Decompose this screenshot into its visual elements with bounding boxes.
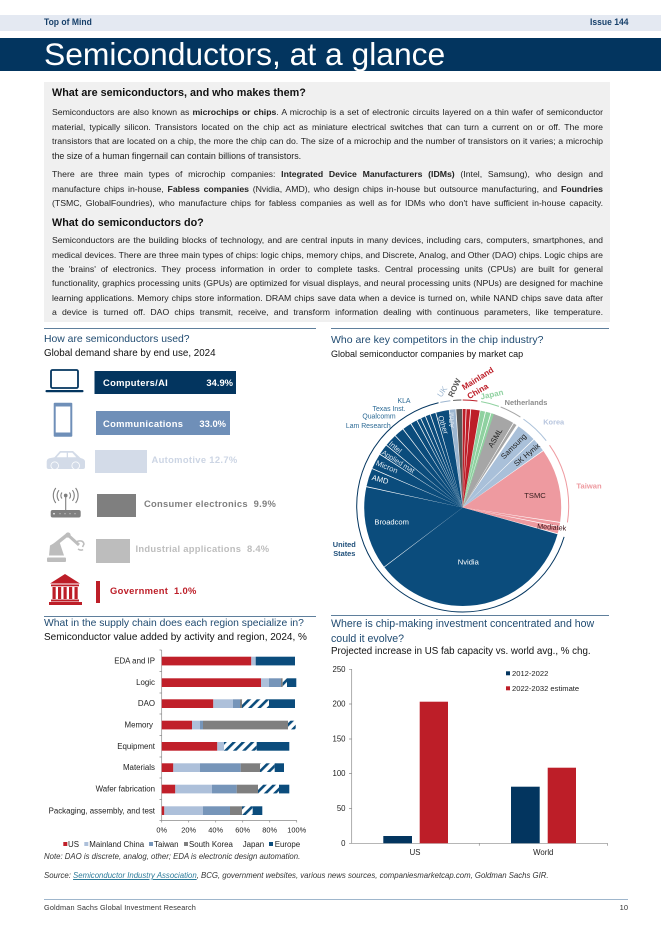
bars: Wafer fabrication <box>162 785 289 793</box>
bar: consumer electronics: Consumer electronics 9.9% <box>144 498 276 509</box>
slice labels: TSMC <box>524 491 546 500</box>
text block: functions: a device is turned off. DAO chips transmit, receive, and transform information dealing with continuous parameters, like temperature. <box>52 307 603 317</box>
bar: automotive <box>95 450 238 473</box>
icon: phone <box>54 403 72 437</box>
icon: laptop <box>46 370 84 392</box>
slice labels: SK Hynix <box>512 441 542 468</box>
y axis labels: 0 <box>341 839 346 848</box>
outer labels: Mainland <box>460 366 495 392</box>
panel: supply chain <box>44 616 316 861</box>
footer publisher: Goldman Sachs Global Investment Research <box>44 903 196 912</box>
icon: router <box>51 488 81 518</box>
text block: functions: the 'brains' of electronics. They process information in order to complete tasks. Central processing units (CPUs) are built for general <box>52 264 603 274</box>
y axis labels: 100 <box>332 769 346 778</box>
row labels: Equipment <box>117 742 156 751</box>
x axis labels: 60% <box>235 826 251 834</box>
panel: investment <box>331 615 609 857</box>
outer labels: KLA <box>397 398 411 405</box>
x axis labels: US <box>410 848 420 857</box>
title: Semiconductors, at a glance <box>44 36 445 72</box>
bar: consumer electronics <box>97 494 276 517</box>
panel heading: How are semiconductors used? <box>44 334 190 345</box>
panel: key competitors <box>331 328 609 612</box>
bars: Materials <box>162 763 284 772</box>
y axis labels: 200 <box>332 700 346 708</box>
row labels: DAO <box>138 699 155 708</box>
slice labels: Intel <box>387 439 404 456</box>
bars: US <box>383 702 448 843</box>
text block: company types: There are three main types of microchip companies: Integrated Device Manufacturers (IDMs) (Intel, Samsung), who design and <box>52 169 603 179</box>
outer labels: Texas Inst. <box>373 406 406 413</box>
section label: Top of Mind: Top of Mind <box>44 17 92 28</box>
bars: World <box>511 768 576 843</box>
outer labels: Korea <box>543 418 565 427</box>
panel heading: Where is chip-making investment concentrated and how <box>331 618 594 630</box>
outer labels: Japan <box>480 388 504 401</box>
panel heading: What in the supply chain does each region specialize in? <box>44 618 304 629</box>
text block: definition <box>52 107 603 161</box>
x axis labels <box>156 826 307 834</box>
slice labels: ASML <box>486 427 504 449</box>
bar: government <box>96 581 197 603</box>
panel: intro text <box>44 82 610 322</box>
bar: computers <box>94 371 236 394</box>
slice labels: Broadcom <box>374 518 409 527</box>
bars: Logic <box>162 678 296 687</box>
slice labels: Applied mat <box>380 450 415 475</box>
panel heading: could it evolve? <box>331 633 404 645</box>
legend: 2012-2022 <box>512 669 548 678</box>
row labels <box>49 656 156 816</box>
x axis labels <box>410 848 553 857</box>
outer labels <box>333 366 602 558</box>
text block: functions: functionality, graphics processing units (GPUs) are optimized for visual displays, and neural processing units (NPUs) are designed for machine <box>52 278 603 288</box>
panel: how are semiconductors used <box>44 328 316 605</box>
outer labels: UK <box>436 384 450 399</box>
x axis labels: 0% <box>156 826 167 834</box>
panel subheading: Projected increase in US fab capacity vs. world avg., % chg. <box>331 646 591 657</box>
row labels: Logic <box>136 678 155 687</box>
footer <box>44 899 628 914</box>
heading: what do semiconductors do: What do semiconductors do? <box>52 217 204 229</box>
bar: communications: 33.0% <box>199 418 227 429</box>
panel subheading: Global semiconductor companies by market cap <box>331 349 523 359</box>
bars: Packaging, assembly, and test <box>162 806 262 815</box>
axes <box>349 669 608 846</box>
title band <box>0 38 661 71</box>
text block: definition: transistors that are located on a chip, the more the chip can do. The size of a microchip and the number of transistors on it varies; a microchip <box>52 136 603 146</box>
text block: definition: material, typically silicon. Transistors located on the chip act as miniature electrical switches that can turn a current on or off. The more <box>52 122 603 132</box>
outer labels: Netherlands <box>505 398 547 407</box>
slice labels: Other <box>436 414 451 436</box>
bars: EDA and IP <box>162 657 295 665</box>
text block: company types: (TSMC, GlobalFoundries), who manufacture chips for fabless companies as well as for IDMs who don't have sufficient in-house capacity. <box>52 198 603 208</box>
icon: robot arm <box>47 532 84 562</box>
text block: functions: medical devices. There are three main types of chips: logic chips, memory chips, and Discrete, Analog, and Other (DAO) chips. Logic chips are <box>52 250 603 260</box>
text block: definition: the size of a human fingernail can contain billions of transistors. <box>52 151 301 161</box>
slice labels: Nvidia <box>458 557 480 566</box>
bar: government: Government 1.0% <box>110 585 197 596</box>
slice labels: ARM <box>449 412 456 428</box>
x axis labels: 100% <box>287 826 307 834</box>
row labels: Wafer fabrication <box>96 784 155 794</box>
pie chart: market cap <box>333 366 602 612</box>
page number: 10 <box>620 903 628 912</box>
bar: automotive: Automotive 12.7% <box>152 454 238 465</box>
outer labels: States <box>333 549 355 558</box>
legend: Japan <box>243 840 264 849</box>
legend: Taiwan <box>154 840 179 849</box>
panel subheading: Global demand share by end use, 2024 <box>44 348 216 359</box>
slice labels <box>371 412 567 566</box>
legend: Europe <box>275 840 301 849</box>
bar: communications: Communications <box>103 418 183 429</box>
text block: company types: manufacture chips in-house, Fabless companies (Nvidia, AMD), who design chips in-house but outsource manufacturing, and Foundries <box>52 184 603 194</box>
row labels: Materials <box>123 763 155 772</box>
slice labels: Mediatek <box>537 522 567 533</box>
bars: Equipment <box>162 742 289 751</box>
demand share chart <box>46 369 276 605</box>
icon: government building <box>49 574 82 605</box>
bar: communications <box>96 411 230 435</box>
outer labels: Lam Research <box>346 423 391 430</box>
slice labels: Micron <box>375 458 399 475</box>
bar: industrial applications: Industrial applications 8.4% <box>136 543 270 554</box>
header band <box>0 15 661 31</box>
legend: US <box>68 840 79 849</box>
icon: car <box>47 451 85 470</box>
x axis labels: 20% <box>181 826 197 834</box>
panel heading: Who are key competitors in the chip industry? <box>331 334 543 346</box>
slice labels: AMD <box>371 473 390 486</box>
bar chart: fab capacity <box>332 665 608 857</box>
panel heading <box>331 618 594 645</box>
outer labels: Taiwan <box>576 482 602 491</box>
text block: functions <box>52 235 603 317</box>
heading: what are semiconductors: What are semiconductors, and who makes them? <box>52 87 306 99</box>
slice labels: Samsung <box>499 432 528 461</box>
outer region arcs <box>357 400 569 612</box>
row labels: Packaging, assembly, and test <box>49 806 156 816</box>
axis <box>160 650 297 822</box>
legend <box>506 669 579 693</box>
y axis labels: 250 <box>332 665 346 674</box>
chart note: Note: DAO is discrete, analog, other; EDA is electronic design automation. <box>44 852 300 861</box>
y axis labels: 150 <box>332 734 346 744</box>
outer labels: Qualcomm <box>362 414 396 421</box>
bar: computers: Computers/AI <box>103 377 168 388</box>
legend: Mainland China <box>89 840 145 849</box>
text block: definition: Semiconductors are also known as microchips or chips. A microchip is a set of electronic circuits layered on a thin wafer of semiconductor <box>52 107 603 117</box>
outer labels: United <box>333 540 356 549</box>
issue number: Issue 144 <box>590 17 629 28</box>
source line: Source: Semiconductor Industry Association, BCG, government websites, various news sources, companiesmarketcap.com, Goldman Sachs GIR. <box>44 871 549 880</box>
row labels: EDA and IP <box>114 656 155 666</box>
text block: functions: learning applications. Memory chips store information. DRAM chips save data when a device is turned on, while NAND chips save data after <box>52 293 603 303</box>
row labels: Memory <box>124 720 153 730</box>
x axis labels: 80% <box>262 826 278 834</box>
legend <box>63 840 301 849</box>
text block: company types <box>52 169 603 208</box>
legend: 2022-2032 estimate <box>512 684 579 693</box>
legend: South Korea <box>189 840 233 849</box>
y axis labels <box>332 665 346 848</box>
y axis labels: 50 <box>337 804 346 813</box>
outer labels: China <box>466 382 490 401</box>
stacked bar chart <box>49 650 307 849</box>
text block: functions: Semiconductors are the building blocks of technology, and are central inputs in many devices, including cars, computers, smartphones, and <box>52 235 603 245</box>
pie slices <box>413 458 512 557</box>
bar: computers: 34.9% <box>206 377 234 388</box>
panel subheading: Semiconductor value added by activity and region, 2024, % <box>44 632 307 643</box>
outer labels: ROW <box>446 377 463 399</box>
x axis labels: World <box>533 848 553 857</box>
bars: DAO <box>162 699 295 708</box>
x axis labels: 40% <box>208 826 224 834</box>
bars: Memory <box>162 721 296 729</box>
bar: industrial applications <box>96 539 270 563</box>
